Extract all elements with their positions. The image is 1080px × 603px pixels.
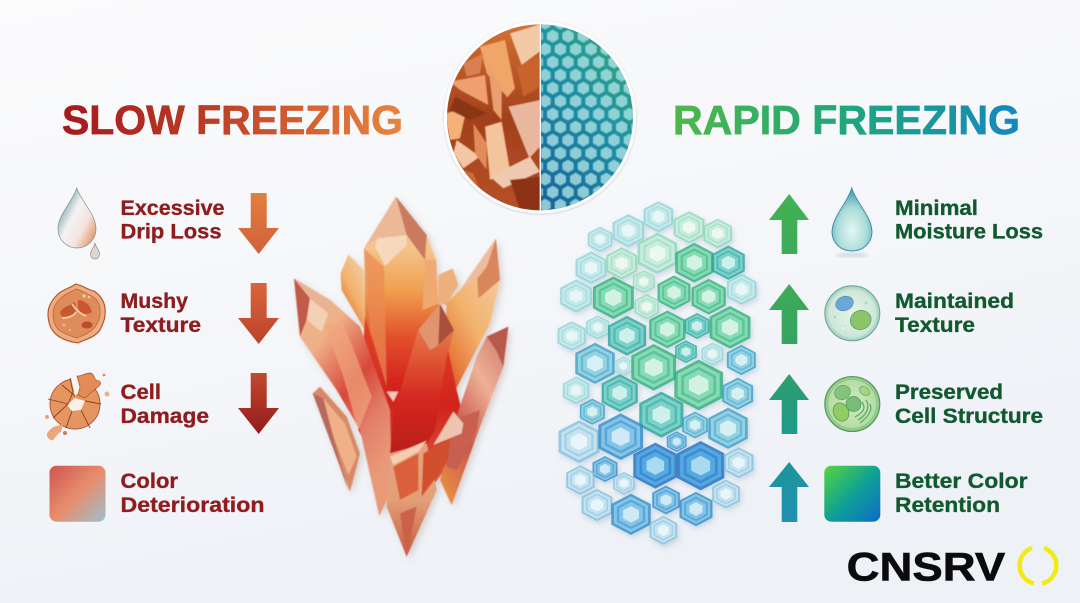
label: excessive drip loss xyxy=(120,196,225,244)
label: preserved cell structure: Cell Structure xyxy=(895,404,1043,428)
left large shard xyxy=(294,278,392,516)
label: cell damage: Cell xyxy=(120,380,161,404)
lower-left shard xyxy=(313,387,360,492)
icon: color deterioration swatch xyxy=(50,466,106,522)
logo mark: yellow brackets xyxy=(1020,548,1056,584)
label: maintained texture: Maintained xyxy=(895,289,1014,313)
label: better color retention: Better Color xyxy=(895,469,1028,493)
icon: cell damage xyxy=(45,373,110,440)
lower-right facets xyxy=(387,392,480,497)
title: rapid freezing: RAPID FREEZING xyxy=(673,97,1020,143)
label: mushy texture: Texture xyxy=(120,313,201,337)
far right shard xyxy=(440,327,508,505)
arrow down 3 xyxy=(238,373,279,434)
label: minimal moisture loss: Minimal xyxy=(895,196,978,220)
central tall shard xyxy=(364,197,438,403)
label: better color retention xyxy=(895,469,1028,517)
arrow up 4 xyxy=(769,462,809,522)
icon: mushy texture xyxy=(48,284,105,343)
arrow down 2 xyxy=(238,283,279,344)
arrow up 3 xyxy=(769,374,809,434)
label: cell damage xyxy=(120,380,209,428)
icon: color retention swatch xyxy=(824,466,880,522)
comparison circle xyxy=(443,20,638,217)
label: minimal moisture loss xyxy=(895,196,1043,244)
bottom shard xyxy=(387,441,437,557)
label: minimal moisture loss: Moisture Loss xyxy=(895,220,1043,244)
label: color deterioration xyxy=(120,469,264,517)
rapid freezing list xyxy=(769,188,1043,522)
label: mushy texture: Mushy xyxy=(120,289,188,313)
label: excessive drip loss: Drip Loss xyxy=(120,220,222,244)
icon: drip loss drop xyxy=(58,188,100,259)
back shards xyxy=(341,238,500,407)
circle right half: small hexagons xyxy=(541,20,638,217)
label: mushy texture xyxy=(120,289,201,337)
red body filler xyxy=(358,303,465,490)
title: slow freezing: SLOW FREEZING xyxy=(62,97,403,143)
label: better color retention: Retention xyxy=(895,493,1000,517)
label: color deterioration: Color xyxy=(120,469,179,493)
small hexagon ice crystal cluster xyxy=(558,201,756,545)
icon: plant cell structure xyxy=(825,376,880,432)
icon: moisture drop xyxy=(832,188,872,258)
icon: healthy cell xyxy=(825,286,880,341)
slow freezing list xyxy=(45,188,279,522)
label: cell damage: Damage xyxy=(120,404,209,428)
logo: CNSRV: CNSRV xyxy=(847,546,1006,590)
label: preserved cell structure: Preserved xyxy=(895,380,1003,404)
label: excessive drip loss: Excessive xyxy=(120,196,225,220)
hexagon grid xyxy=(558,201,756,545)
arrow up 1 xyxy=(769,194,809,254)
central front shard xyxy=(390,304,454,460)
arrow up 2 xyxy=(769,284,809,344)
logo: CNSRV xyxy=(847,546,1056,590)
label: color deterioration: Deterioration xyxy=(120,493,264,517)
label: maintained texture xyxy=(895,289,1014,337)
label: preserved cell structure xyxy=(895,380,1043,428)
arrow down 1 xyxy=(238,193,279,254)
circle left half: large crystals xyxy=(443,20,638,217)
large orange-red crystal cluster xyxy=(294,197,508,557)
label: maintained texture: Texture xyxy=(895,313,975,337)
